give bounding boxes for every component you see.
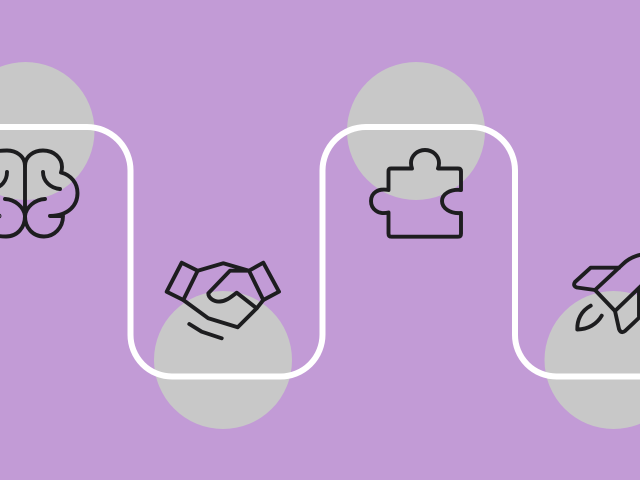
icon: rocket: [574, 254, 640, 332]
icon: handshake: [167, 263, 279, 338]
icon: puzzle piece: [371, 150, 461, 237]
winding white path: [0, 127, 640, 376]
circles behind icons: [0, 62, 640, 429]
icon: brain: [0, 150, 78, 236]
